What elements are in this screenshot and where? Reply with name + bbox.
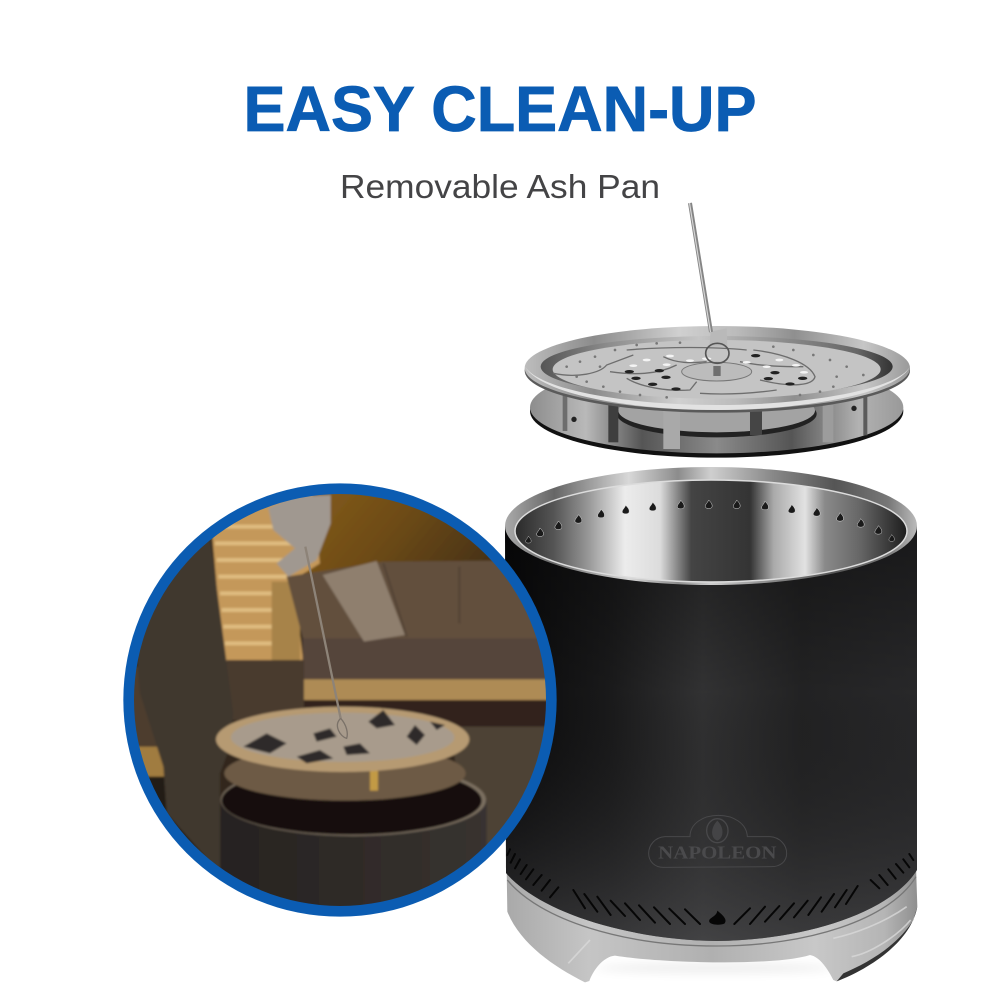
removable ash pan (525, 326, 910, 458)
hook (337, 718, 347, 738)
black cylinder body (505, 526, 917, 941)
ash-covered lower plate (223, 758, 466, 802)
vent slots (507, 849, 913, 925)
ottoman (227, 660, 304, 720)
support legs (563, 392, 867, 449)
pan rim (525, 326, 910, 413)
subtitle: Removable Ash Pan (340, 168, 660, 205)
trousers (137, 540, 232, 868)
support legs (370, 767, 378, 791)
glove (268, 495, 331, 577)
under-sofa shadow (304, 700, 567, 727)
blue circle background (123, 483, 557, 917)
lower plate (530, 361, 903, 458)
Napoleon logo: NAPOLEON (658, 843, 777, 863)
perforated pan floor (553, 340, 881, 399)
brick courses (214, 524, 291, 646)
photo can body (221, 804, 487, 906)
title: EASY CLEAN-UP (244, 73, 756, 145)
interior wall (515, 480, 907, 582)
fire pit: body and base (505, 526, 917, 982)
sofa back (287, 560, 560, 640)
circular inset photo (113, 473, 567, 927)
amber back wall (305, 494, 491, 574)
centre hub and lifting hook (682, 328, 752, 381)
wicker strip (304, 679, 567, 700)
fire pit: rim and interior (505, 467, 917, 585)
lower left floor (150, 777, 198, 848)
pillow (323, 561, 405, 642)
Napoleon logo (649, 815, 787, 867)
floor and base tones (136, 538, 456, 868)
floor rug (454, 726, 544, 845)
sofa seat (302, 640, 545, 680)
pan front lip (525, 367, 910, 410)
brick wall (210, 496, 322, 662)
wicker post (272, 582, 300, 662)
charcoal chunks (243, 710, 445, 763)
photo can opening (220, 779, 488, 838)
base shadow (595, 963, 835, 973)
outer rim (505, 467, 917, 585)
flame vent holes (526, 500, 894, 543)
lifting rod (305, 547, 341, 718)
photo scene (134, 494, 546, 906)
lifting rod (690, 203, 711, 332)
stainless base ring (507, 865, 917, 982)
pan outer (216, 707, 469, 772)
ash bed (231, 713, 454, 762)
left sofa (134, 666, 156, 746)
